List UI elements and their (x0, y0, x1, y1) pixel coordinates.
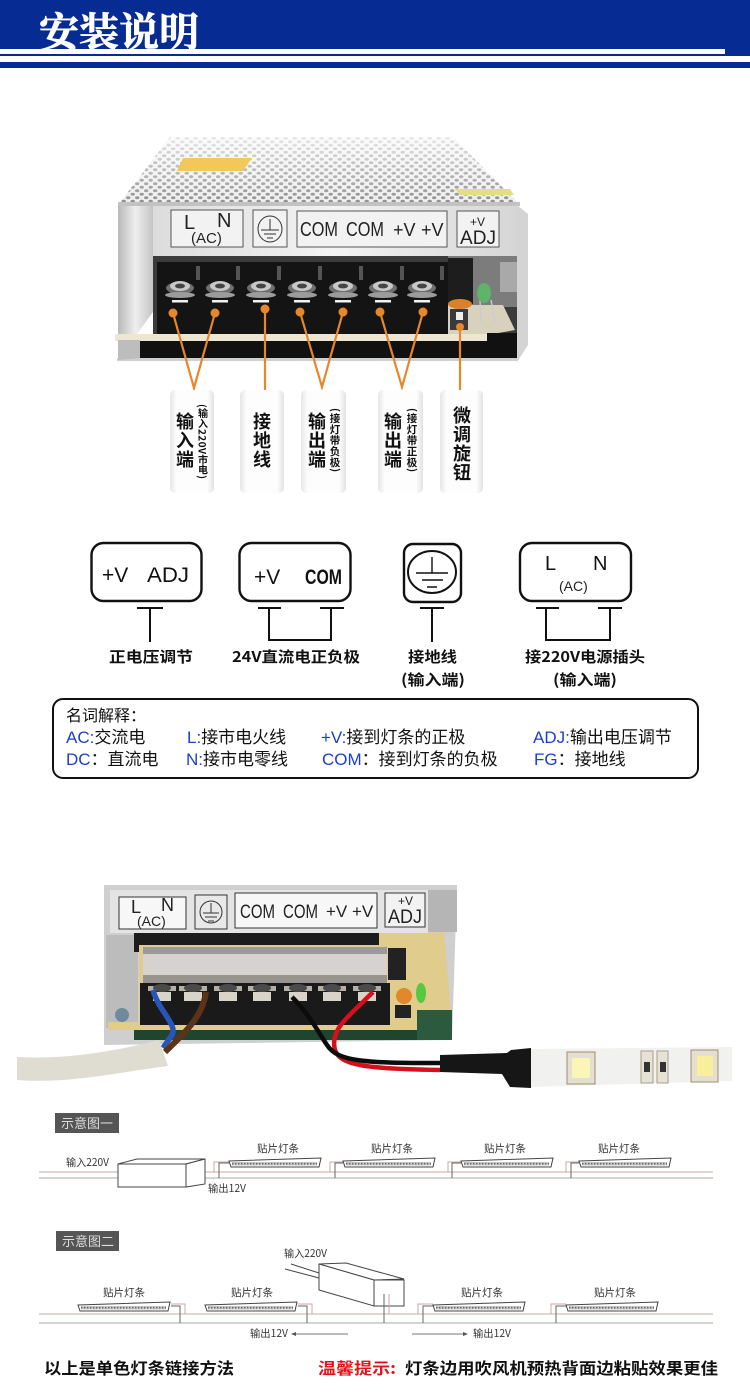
symbol: ac input: (输入端) (553, 669, 617, 690)
strip four: 贴片灯条 (598, 1141, 640, 1156)
led strip (440, 1047, 732, 1088)
right output arrow: 输出12V (473, 1326, 512, 1341)
label: positive output: 输出端 (380, 411, 406, 469)
label plate: L (131, 897, 141, 917)
label plate: +V (470, 215, 485, 229)
pcb with knob and green led (448, 283, 495, 330)
label plate: +V (393, 220, 416, 240)
mains cable (17, 990, 206, 1081)
case body (115, 202, 528, 362)
label: negative output: 输出端 (304, 411, 330, 469)
label: negative output (301, 390, 346, 493)
glossary row two: DC：直流电 (66, 750, 159, 769)
method text: 以上是单色灯条链接方法 (44, 1355, 234, 1379)
label: trim knob (440, 390, 483, 493)
label: input terminal: (输入220V市电) (196, 404, 210, 479)
symbol: voltage adjust: ADJ (147, 564, 189, 587)
label plate: N (161, 895, 174, 915)
title: 安装说明 (39, 1, 199, 58)
glossary row two: FG：接地线 (534, 750, 626, 769)
label: input terminal (170, 390, 214, 493)
strip one (229, 1141, 321, 1167)
symbol: voltage adjust: +V (102, 564, 128, 587)
strip two: 贴片灯条 (231, 1285, 273, 1300)
symbol: voltage adjust: 正电压调节 (109, 646, 193, 667)
label: positive output: (接灯带正极) (404, 408, 420, 473)
glossary row one: ADJ:输出电压调节 (533, 728, 672, 747)
glossary row one: +V:接到灯条的正极 (321, 728, 465, 747)
tip label: 温馨提示: (318, 1355, 396, 1379)
label: input terminal: 输入端 (172, 411, 198, 469)
label plate: +V (398, 894, 413, 908)
strip three: 贴片灯条 (461, 1285, 503, 1300)
diagram one (39, 1113, 713, 1196)
symbol: ac input: N (593, 553, 607, 575)
tag: 示意图二 (62, 1231, 114, 1250)
power box (118, 1159, 205, 1187)
left output arrow: 输出12V (250, 1326, 289, 1341)
tip text: 灯条边用吹风机预热背面边粘贴效果更佳 (405, 1355, 718, 1379)
label plate: COM (346, 219, 384, 241)
right output arrow (412, 1326, 512, 1341)
symbol: ground (401, 544, 465, 690)
label: ground: 接地线 (249, 412, 275, 469)
strip one (78, 1285, 170, 1311)
symbol: dc output: +V (254, 566, 280, 589)
label plate: ADJ (460, 228, 496, 249)
symbol: dc output: 24V直流电正负极 (232, 646, 360, 667)
footer note (44, 1355, 718, 1379)
panel: power supply terminal photo (115, 137, 528, 493)
symbol: dc output: COM (305, 566, 342, 589)
diagram two (39, 1231, 713, 1341)
symbol: ac input: (AC) (559, 578, 588, 594)
bus wires (39, 1304, 713, 1323)
perforated lid (118, 137, 520, 205)
strip one: 贴片灯条 (103, 1285, 145, 1300)
glossary row two (66, 750, 626, 769)
orange callout lines (168, 304, 464, 390)
label plate: COM (300, 219, 338, 241)
glossary heading: 名词解释： (66, 707, 146, 725)
bus wires (39, 1162, 713, 1178)
left output arrow (250, 1326, 348, 1341)
label plate: L (184, 212, 195, 234)
glossary row one: AC:交流电 (66, 728, 145, 747)
symbol: ground: (输入端) (401, 669, 465, 690)
low voltage wires (292, 992, 440, 1070)
terminal block (157, 262, 448, 334)
label plate: +V (421, 220, 444, 240)
label: ground (240, 390, 284, 493)
panel: terminal symbols (92, 543, 645, 690)
strip three (461, 1141, 553, 1167)
symbol: ac input (520, 543, 645, 690)
glossary row two: N:接市电零线 (186, 750, 288, 769)
label plate: N (217, 210, 231, 232)
panel: glossary (53, 699, 698, 778)
label plate: COM (240, 902, 275, 923)
glossary row one: L:接市电火线 (187, 728, 286, 747)
label: trim knob: 微调旋钮 (449, 406, 475, 482)
label: negative output: (接灯带负极) (328, 408, 342, 473)
input label: 输入220V (284, 1246, 328, 1261)
power box (285, 1263, 404, 1323)
label plate: (AC) (137, 913, 166, 929)
tag: 示意图一 (61, 1113, 113, 1132)
panel: wiring photo (17, 885, 732, 1088)
strip four: 贴片灯条 (594, 1285, 636, 1300)
strip one: 贴片灯条 (257, 1141, 299, 1156)
label plate (110, 890, 428, 933)
strip three (433, 1285, 525, 1311)
label plate (118, 202, 520, 256)
symbol: ground: 接地线 (408, 646, 457, 667)
strip two: 贴片灯条 (371, 1141, 413, 1156)
output label: 输出12V (208, 1181, 247, 1196)
label plate: COM (283, 902, 318, 923)
label plate: (AC) (191, 230, 222, 247)
strip two (343, 1141, 435, 1167)
strip four (579, 1141, 671, 1167)
label plate: +V (352, 902, 374, 921)
strip two (205, 1285, 297, 1311)
pcb parts (395, 983, 426, 1018)
symbol: ac input: L (545, 553, 556, 575)
header banner (0, 0, 750, 68)
glossary row two: COM：接到灯条的负极 (322, 750, 498, 769)
strip four (566, 1285, 658, 1311)
case (104, 885, 457, 1045)
symbol: dc output (232, 543, 360, 667)
symbol: voltage adjust (92, 543, 202, 667)
strip three: 贴片灯条 (484, 1141, 526, 1156)
label plate: +V (326, 902, 348, 921)
label: positive output (378, 390, 423, 493)
label plate: ADJ (388, 907, 422, 928)
input label: 输入220V (66, 1155, 110, 1170)
glossary row one (66, 728, 672, 747)
terminal block with clear cover (140, 947, 390, 1025)
symbol: ac input: 接220V电源插头 (525, 646, 645, 667)
